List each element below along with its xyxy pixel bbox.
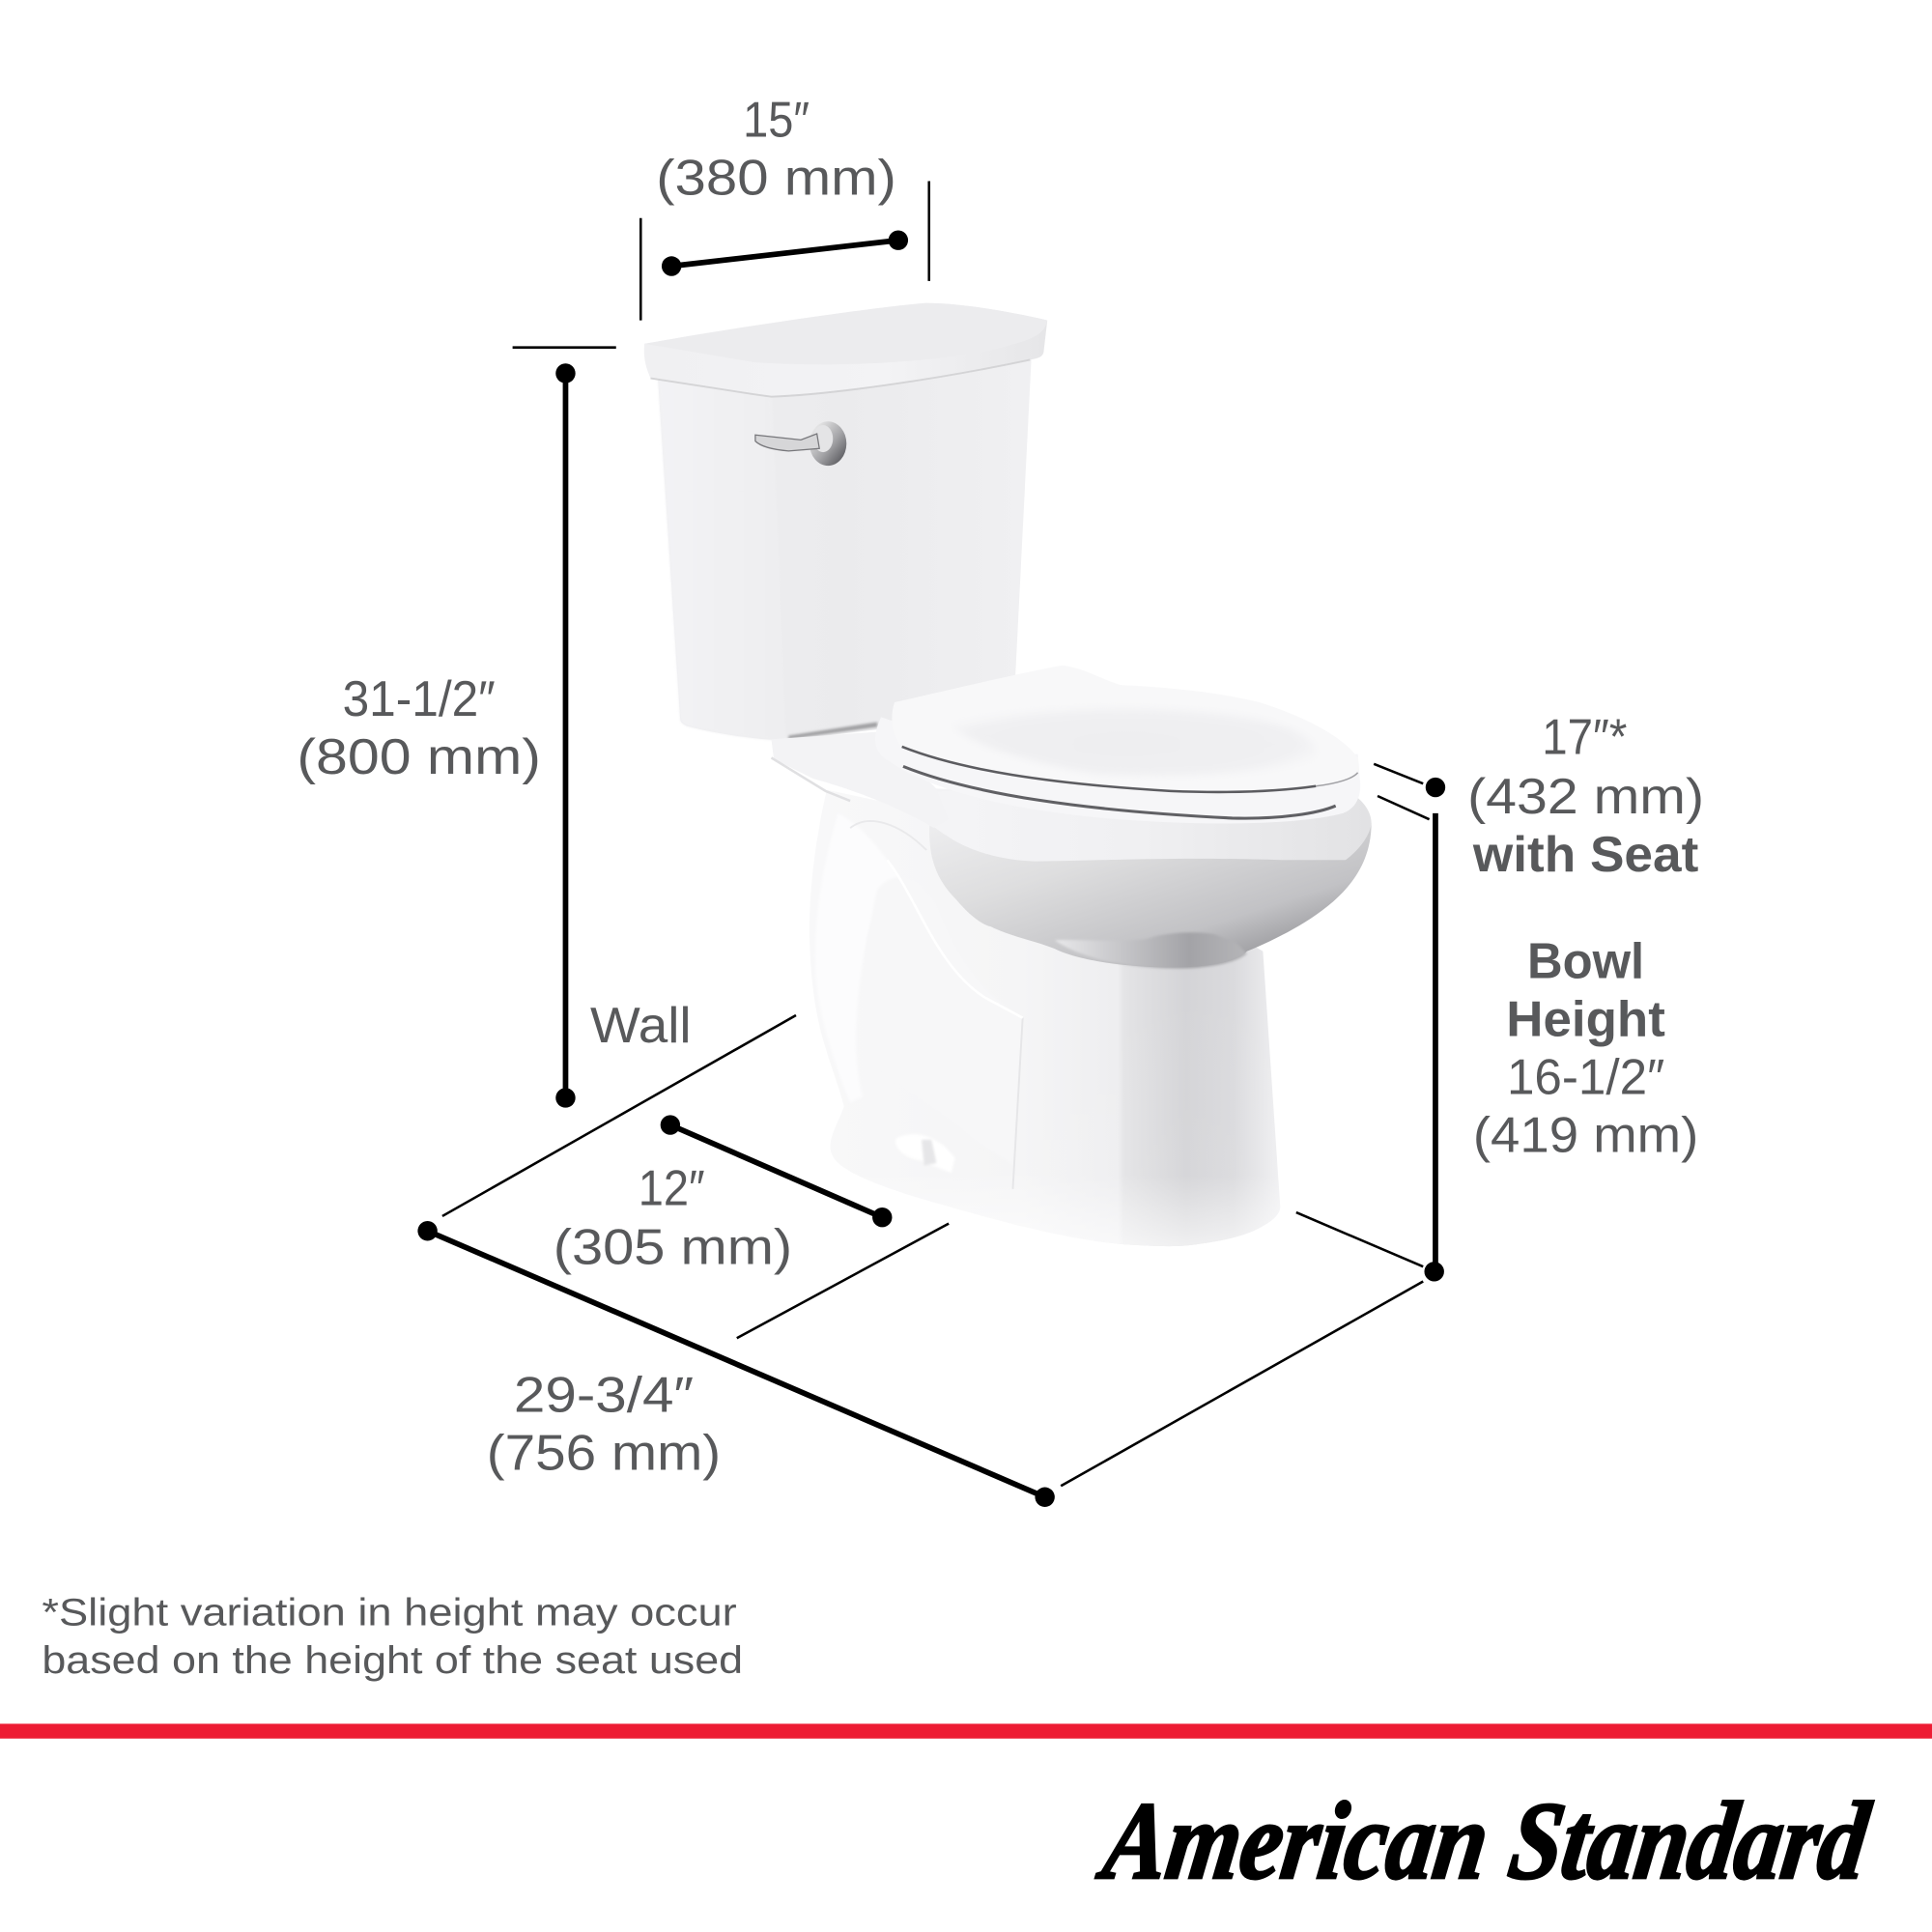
footnote — [42, 1591, 743, 1682]
dimension: tank width 15 in — [640, 93, 929, 321]
flush handle — [755, 421, 846, 466]
label: bowl height: 16-1/2″ — [1507, 1050, 1664, 1106]
dimension: depth 29-3/4 in — [417, 1015, 1423, 1507]
label: with seat — [1467, 710, 1704, 883]
toilet bowl — [906, 777, 1372, 969]
label: 15″ — [743, 93, 810, 149]
wall extension line — [442, 1015, 796, 1216]
label: bowl height: (419 mm) — [1473, 1108, 1698, 1164]
label: (756 mm) — [487, 1426, 721, 1482]
extension line — [737, 1224, 949, 1338]
label: (380 mm) — [656, 151, 896, 207]
extension lines — [640, 182, 929, 321]
tank lid — [644, 303, 1047, 397]
label: 12″ — [639, 1160, 705, 1216]
measure bar — [662, 231, 908, 276]
top extension line — [513, 347, 616, 349]
toilet pedestal — [810, 790, 1280, 1246]
label: 31-1/2″ — [343, 671, 496, 727]
footnote: *Slight variation in height may occur — [42, 1591, 737, 1634]
dimension: overall height 31-1/2 in — [297, 348, 616, 1108]
extension lines — [1296, 764, 1430, 1266]
measure bar — [417, 1221, 1055, 1507]
label — [656, 93, 896, 207]
label: with seat: with Seat — [1472, 827, 1698, 883]
measure bar — [555, 363, 576, 1108]
red divider bar — [0, 1723, 1932, 1739]
label: (800 mm) — [297, 729, 541, 785]
measure bar — [661, 1115, 892, 1227]
label: with seat: (432 mm) — [1467, 769, 1704, 825]
dimension: bowl height — [1296, 710, 1704, 1282]
footnote: based on the height of the seat used — [42, 1639, 743, 1682]
wall label: Wall — [590, 998, 692, 1054]
label — [487, 1368, 721, 1482]
label: bowl height: Height — [1506, 992, 1665, 1048]
front extension line — [1061, 1282, 1423, 1486]
dimension: rough-in 12 in — [554, 1115, 949, 1338]
toilet illustration — [644, 303, 1372, 1246]
toilet seat lid — [892, 666, 1358, 792]
label — [297, 671, 541, 785]
measure bar — [1424, 778, 1445, 1282]
label — [554, 1160, 792, 1276]
label: with seat: 17″* — [1542, 710, 1627, 766]
label: bowl height: Bowl — [1527, 934, 1644, 990]
label: 29-3/4″ — [514, 1368, 694, 1424]
toilet tank — [658, 359, 1032, 741]
label: (305 mm) — [554, 1220, 792, 1276]
label: bowl height — [1473, 934, 1698, 1164]
seat deck — [771, 732, 949, 828]
toilet seat ring — [875, 717, 1360, 823]
